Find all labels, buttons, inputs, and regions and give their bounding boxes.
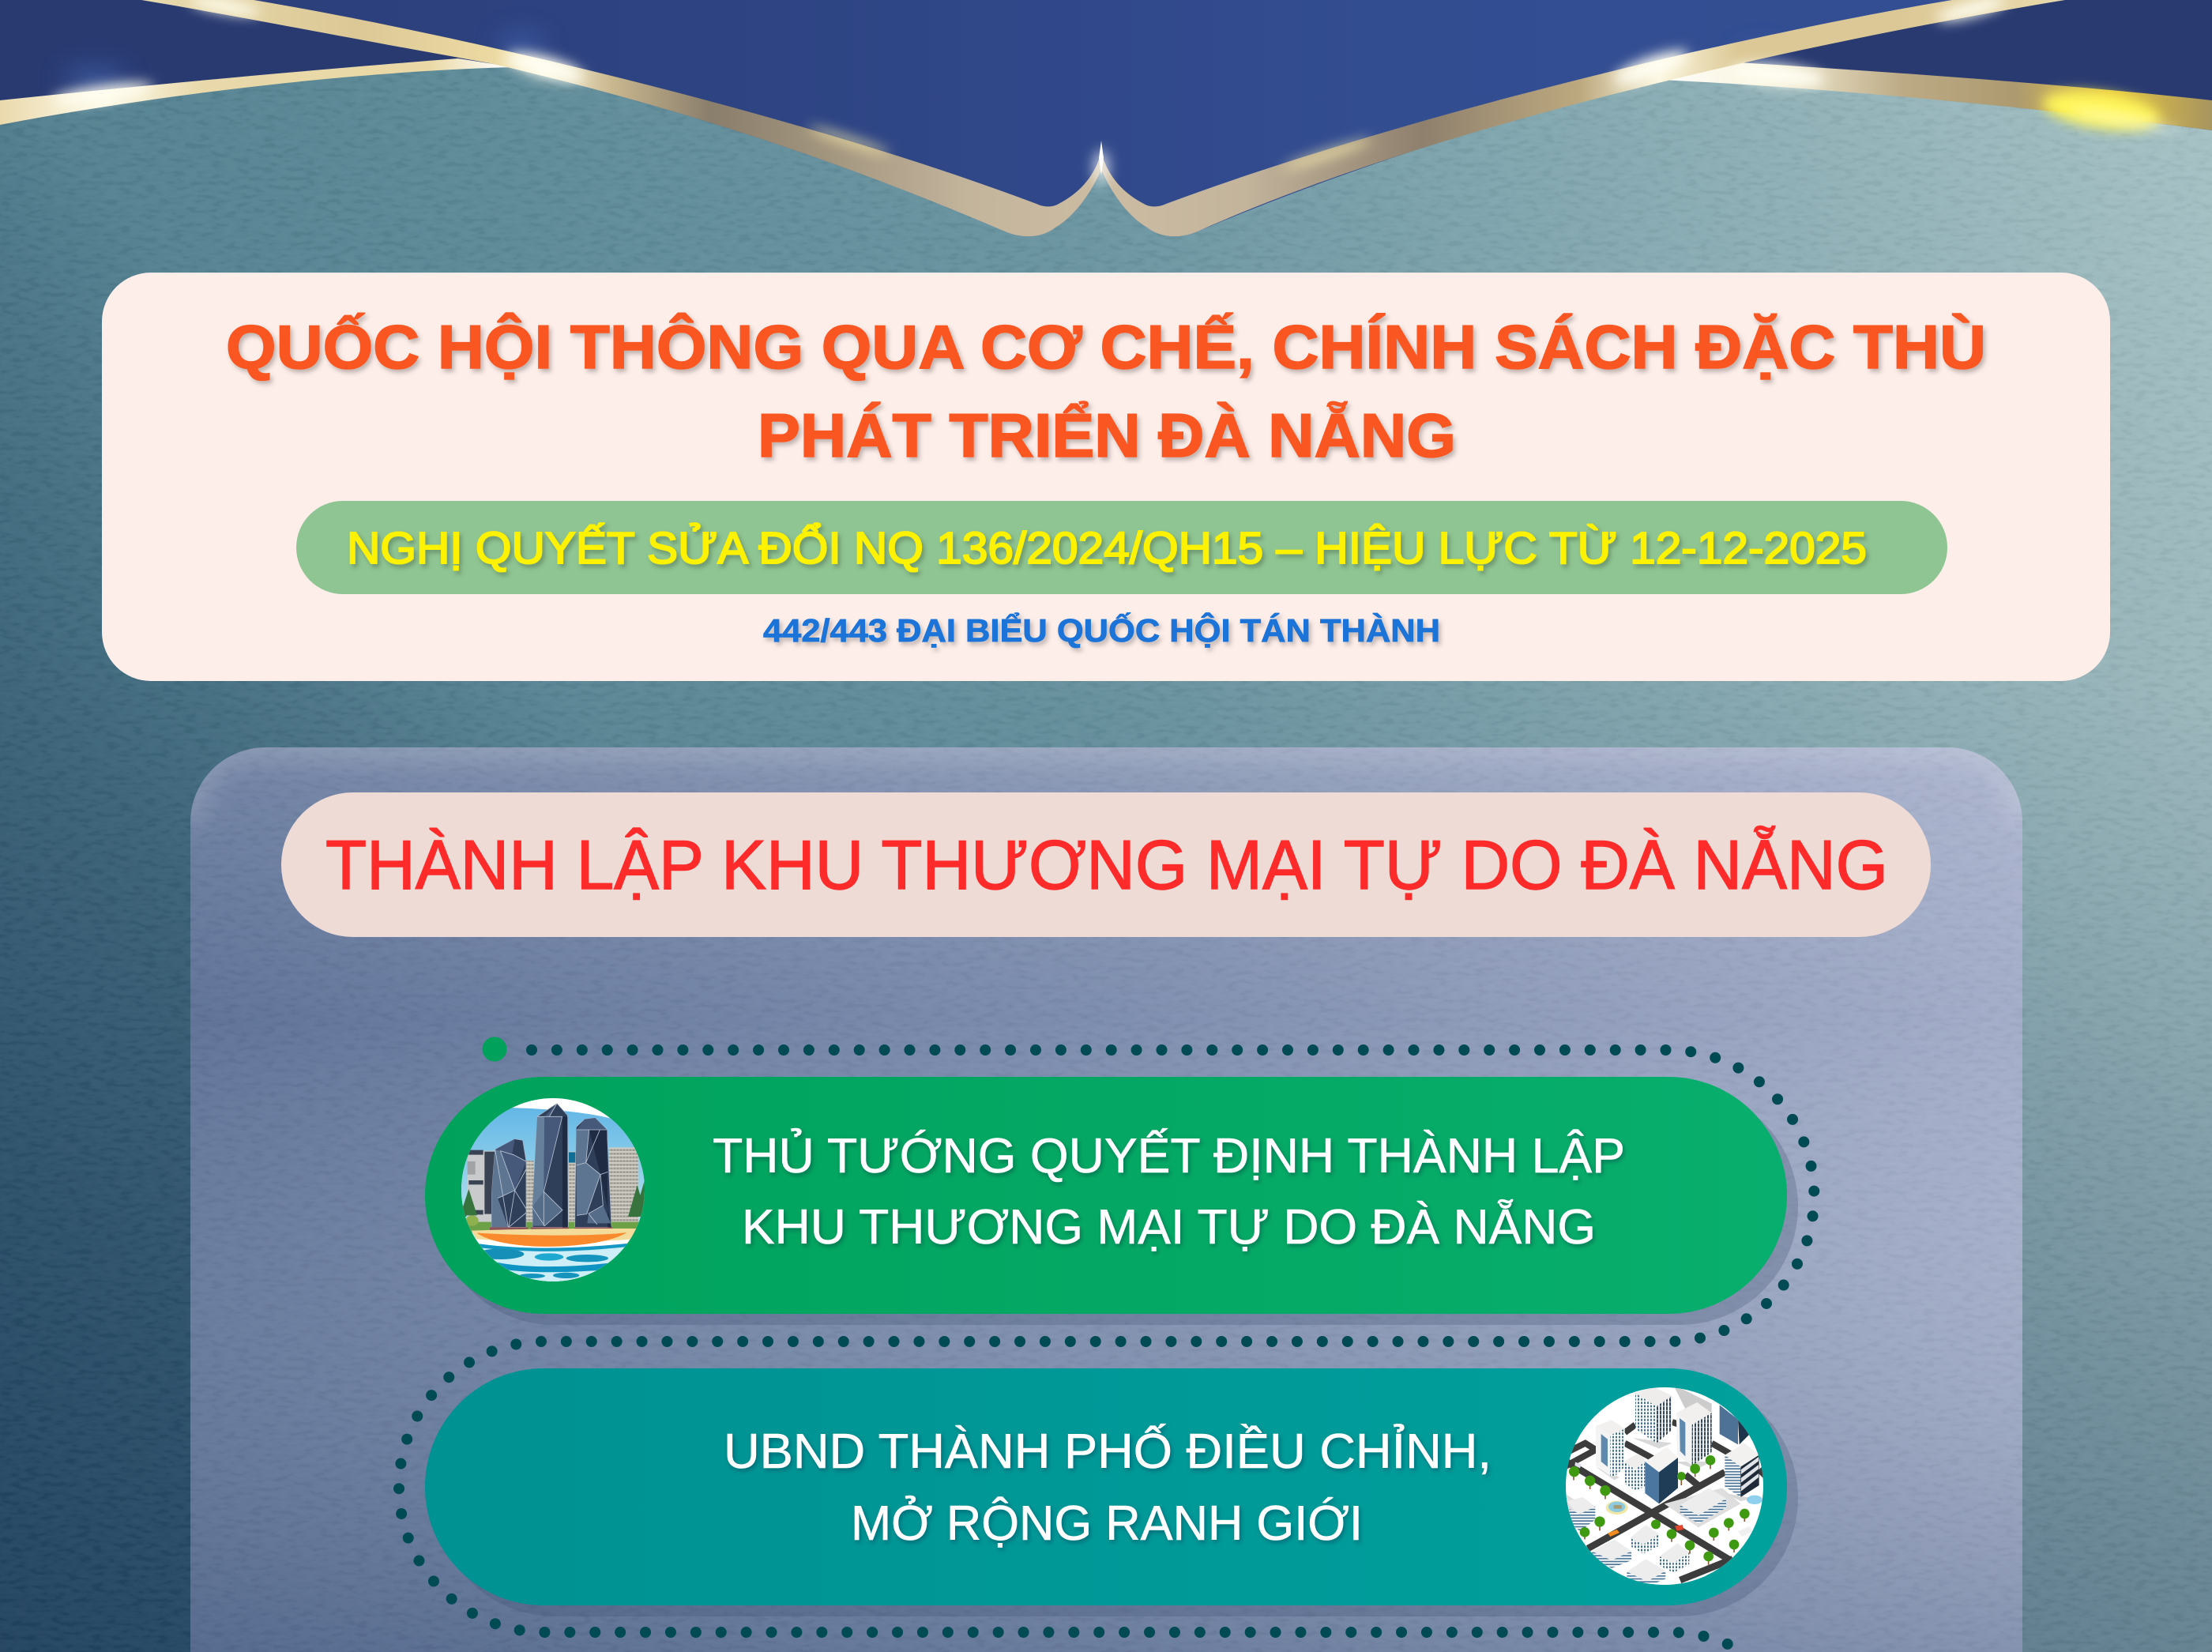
step 1 text: KHU THƯƠNG MẠI TỰ DO ĐÀ NẴNG: [742, 1200, 1596, 1255]
step 2 text: UBND THÀNH PHỐ ĐIỀU CHỈNH,: [724, 1424, 1492, 1479]
title: QUỐC HỘI THÔNG QUA CƠ CHẾ, CHÍNH SÁCH ĐẶC THÙ: [226, 312, 1986, 382]
subtitle pill: NGHỊ QUYẾT SỬA ĐỔI NQ 136/2024/QH15 – HIỆU LỰC TỪ 12-12-2025: [347, 522, 1867, 574]
trees: [1569, 1455, 1750, 1565]
park details: [1574, 1462, 1762, 1537]
section heading pill: THÀNH LẬP KHU THƯƠNG MẠI TỰ DO ĐÀ NẴNG: [325, 826, 1888, 904]
buildings: [1567, 1387, 1759, 1586]
title: [226, 312, 1986, 470]
step 1 text: THỦ TƯỚNG QUYẾT ĐỊNH THÀNH LẬP: [713, 1129, 1625, 1183]
icon: waterfront towers: [461, 1098, 645, 1281]
subtitle pill: [296, 501, 1947, 594]
section heading pill: [281, 792, 1931, 937]
vote count: 442/443 ĐẠI BIỂU QUỐC HỘI TÁN THÀNH: [763, 612, 1440, 649]
step 1 pill: [425, 1077, 1798, 1325]
dotted connector path: [399, 1037, 1814, 1651]
step 2 text: [724, 1424, 1492, 1551]
step 1 text: [713, 1129, 1625, 1255]
header: navy and gold ribbons: [0, 0, 2212, 236]
panel: title card: [102, 273, 2110, 681]
icon: isometric city: [1564, 1387, 1767, 1586]
towers: [491, 1139, 526, 1227]
panel: free trade zone: [190, 747, 2022, 1652]
title: PHÁT TRIỂN ĐÀ NẴNG: [758, 401, 1456, 470]
step 2 text: MỞ RỘNG RANH GIỚI: [851, 1496, 1363, 1551]
step 2 pill: [425, 1368, 1798, 1616]
